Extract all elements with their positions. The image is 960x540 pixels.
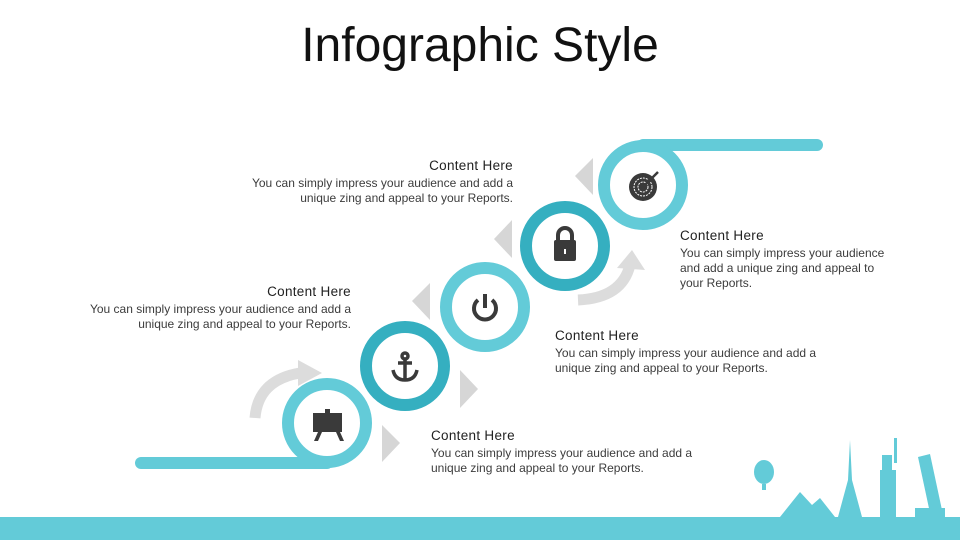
text block 3 (left): Content Here: [267, 284, 351, 299]
text block 1 (top): Content Here: [429, 158, 513, 173]
text block 5 (bottom): You can simply impress your audience and add a unique zing and appeal to your Reports.: [431, 446, 692, 475]
icon: power: [474, 294, 496, 319]
icon: easel: [313, 409, 344, 441]
text block 5 (bottom): Content Here: [431, 428, 515, 443]
text block 3 (left): [90, 284, 352, 331]
icon: anchor: [393, 353, 417, 380]
title: Infographic Style: [301, 19, 659, 72]
text block 4 (middle right): You can simply impress your audience and add a unique zing and appeal to your Reports.: [555, 346, 816, 375]
top line: [643, 139, 817, 151]
curved arrow right: [578, 250, 645, 300]
text block 2 (right): Content Here: [680, 228, 764, 243]
bottom line: [141, 457, 327, 469]
text block 4 (middle right): Content Here: [555, 328, 639, 343]
text block 3 (left): You can simply impress your audience and add a unique zing and appeal to your Reports.: [90, 302, 351, 331]
text block 1 (top): [252, 158, 514, 205]
gray triangles: [382, 158, 593, 462]
circles: [288, 146, 682, 462]
text block 5 (bottom): [431, 428, 692, 475]
bottom band: [0, 517, 960, 540]
curved arrow left: [255, 360, 322, 418]
text block 1 (top): You can simply impress your audience and add a unique zing and appeal to your Reports.: [252, 176, 513, 205]
text block 2 (right): You can simply impress your audience and add a unique zing and appeal to your Reports.: [680, 246, 884, 290]
text block 4 (middle right): [555, 328, 816, 375]
skyline: [754, 438, 945, 517]
icon: target: [629, 172, 658, 201]
icon: lock: [554, 228, 576, 261]
